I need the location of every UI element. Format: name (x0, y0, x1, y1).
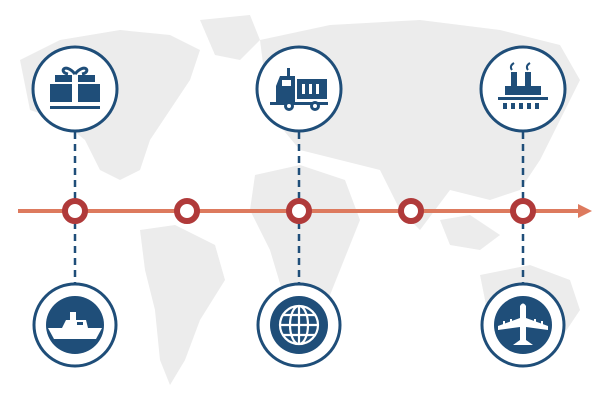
timeline markers (65, 201, 533, 221)
timeline arrow (18, 204, 592, 218)
icon: factory (481, 47, 565, 131)
icon: truck (257, 47, 341, 131)
icon: globe (258, 284, 340, 366)
dashed connectors (75, 132, 523, 283)
icon: ship (34, 284, 116, 366)
icon: gift (33, 47, 117, 131)
icon: airplane (482, 284, 564, 366)
